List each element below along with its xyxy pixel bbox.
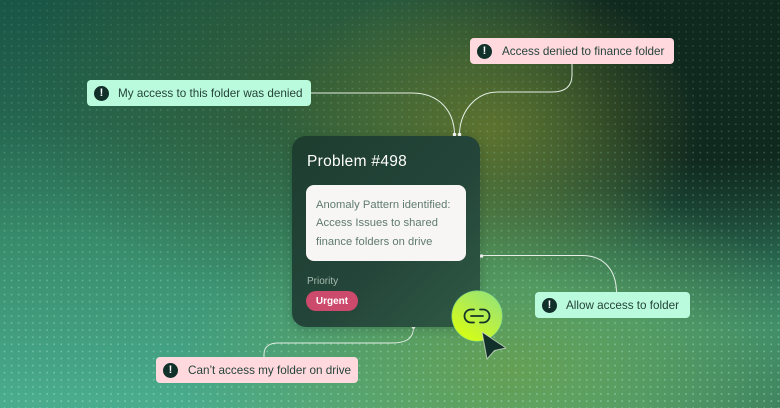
tag: my access denied: [87, 80, 311, 106]
icon: alert: [542, 298, 557, 312]
tag: finance folder denied: [470, 38, 674, 64]
anomaly description box: Anomaly Pattern identified:: [316, 198, 451, 210]
icon: alert: !: [100, 86, 103, 98]
icon: alert: [477, 44, 492, 58]
anomaly description box: [306, 185, 466, 261]
card heading: Problem #498: [307, 152, 407, 170]
icon: alert: [163, 362, 178, 378]
icon: alert: !: [169, 364, 172, 376]
priority label: Priority: [307, 276, 338, 287]
tag: allow access: Allow access to folder: [566, 299, 679, 312]
tag: finance folder denied: Access denied to finance folder: [502, 45, 664, 58]
tag: my access denied: My access to this folder was denied: [118, 87, 302, 100]
urgent badge: Urgent: [316, 296, 348, 307]
tag: allow access: [535, 292, 690, 318]
icon: cursor arrow: [482, 332, 506, 360]
tag: cannot access: [156, 357, 358, 383]
panel: problem card: [292, 136, 480, 327]
icon: alert: !: [483, 44, 486, 56]
anomaly description box: finance folders on drive: [316, 236, 432, 248]
icon: alert: !: [548, 298, 551, 310]
icon: link button: [452, 291, 502, 341]
urgent badge: [306, 291, 358, 311]
anomaly description box: Access Issues to shared: [316, 217, 438, 229]
icon: alert: [94, 86, 109, 100]
tag: cannot access: Can’t access my folder on drive: [188, 364, 351, 377]
